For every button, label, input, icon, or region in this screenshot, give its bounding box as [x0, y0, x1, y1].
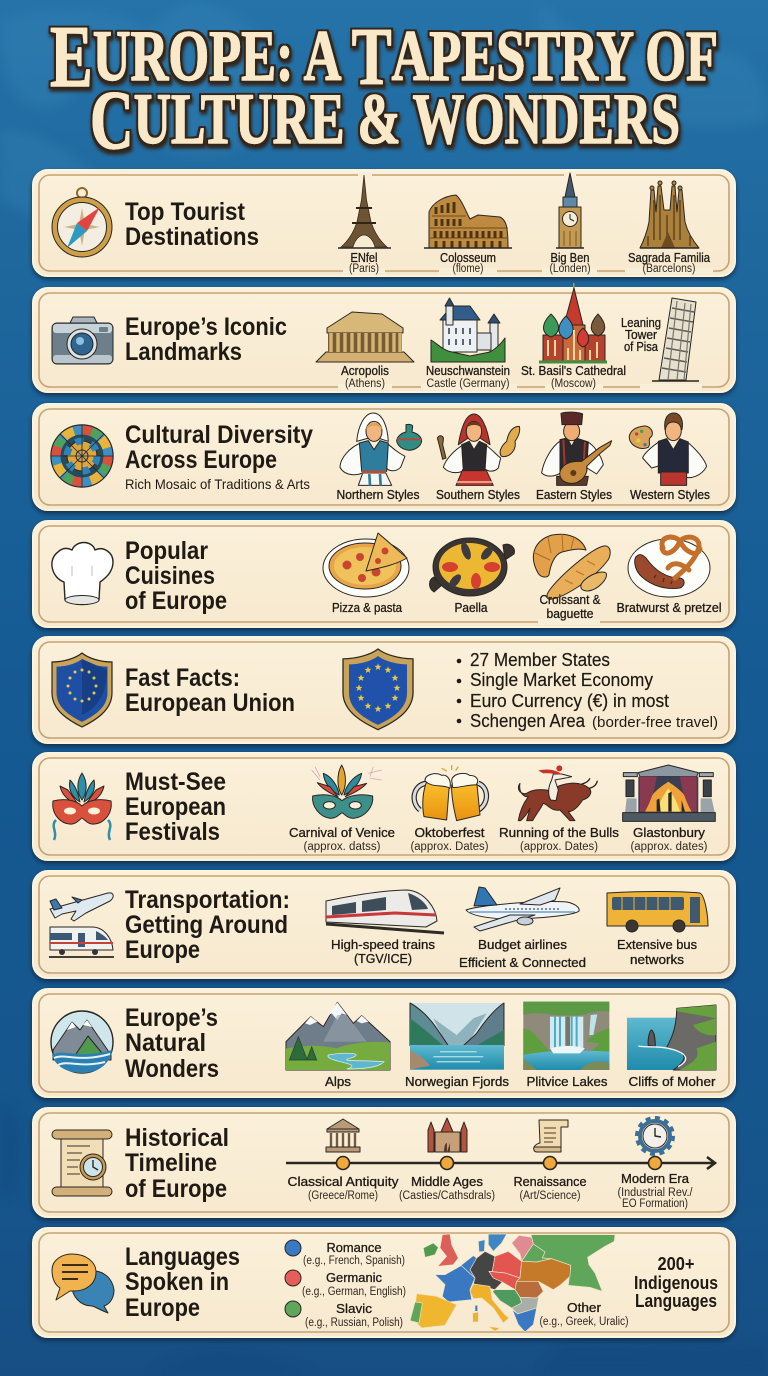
label: Southern Styles: Southern Styles — [436, 488, 520, 502]
facts list — [457, 650, 718, 731]
label: Western Styles: Western Styles — [630, 488, 710, 502]
facts list: 27 Member States — [470, 650, 610, 670]
heading: Europe’s — [125, 1004, 218, 1032]
heading: Landmarks — [125, 338, 242, 366]
legend: Slavic: (e.g., Russian, Polish) — [305, 1317, 403, 1329]
heading: Fast Facts: — [125, 664, 240, 692]
legend: Germanic: Germanic — [326, 1271, 382, 1285]
heading: of Europe — [125, 587, 227, 615]
label: Middle Ages — [399, 1175, 495, 1202]
panel: natural wonders — [33, 989, 735, 1097]
image: Norwegian Fjords — [410, 1003, 504, 1070]
icon: temple — [326, 1119, 360, 1152]
heading: European Union — [125, 689, 295, 717]
callout: 200+ indigenous languages: 200+ — [658, 1254, 694, 1274]
label: Modern Era — [618, 1172, 693, 1210]
label: Other: (e.g., Greek, Uralic) — [540, 1316, 629, 1328]
label: budget airlines: Efficient & Connected — [459, 956, 586, 970]
icon: scroll and clock — [52, 1130, 112, 1196]
heading: Getting Around — [125, 911, 288, 939]
label: Leaning Tower of Pisa: of Pisa — [624, 340, 658, 354]
icon: Big Ben — [556, 173, 584, 248]
label: Classical Antiquity: (Greece/Rome) — [308, 1190, 378, 1202]
heading: Festivals — [125, 818, 220, 846]
panel: transportation — [33, 871, 735, 978]
label: Alps: Alps — [325, 1075, 351, 1089]
icon: Acropolis — [316, 312, 414, 362]
label: Glastonbury: Glastonbury — [633, 826, 706, 840]
panel: cultural diversity — [33, 404, 735, 510]
icon: bull with rider — [518, 765, 597, 821]
label: budget airlines: Budget airlines — [478, 938, 567, 952]
label: Modern Era: (Industrial Rev./ — [618, 1187, 693, 1199]
label: St Basil's Cathedral: (Moscow) — [551, 378, 596, 390]
icon: stained glass mosaic — [51, 425, 113, 487]
heading — [125, 1124, 229, 1203]
label: croissant and baguette: Croissant & — [540, 593, 601, 607]
label: high-speed trains — [331, 938, 435, 966]
heading: Spoken in — [125, 1268, 229, 1296]
panel: historical timeline — [33, 1108, 735, 1217]
legend: Slavic — [285, 1301, 403, 1329]
icon: castle — [428, 1118, 467, 1152]
label: extensive bus networks: networks — [630, 953, 684, 967]
heading — [125, 537, 227, 615]
label: Big Ben: Big Ben — [550, 251, 590, 265]
label: extensive bus networks — [617, 938, 697, 967]
label: Renaissance — [514, 1175, 587, 1202]
figure: Southern style — [437, 414, 520, 485]
heading — [125, 664, 295, 717]
label: Eiffel: ENfel — [350, 251, 378, 265]
label: Acropolis — [341, 364, 389, 390]
heading: Across Europe — [125, 446, 277, 474]
image: Alps — [286, 1002, 390, 1070]
heading: European — [125, 793, 226, 821]
heading: Popular — [125, 537, 208, 565]
label: croissant and baguette — [540, 593, 601, 621]
heading: Europe’s Iconic — [125, 313, 287, 341]
figure: Northern style — [340, 413, 422, 485]
label: Acropolis: (Athens) — [345, 378, 385, 390]
label: Sagrada Familia — [628, 251, 710, 275]
icon: chef hat — [52, 542, 113, 604]
label: Carnival of Venice: Carnival of Venice — [289, 826, 395, 840]
label: bratwurst and pretzel: Bratwurst & pretzel — [616, 601, 722, 615]
image: Cliffs of Moher — [627, 1005, 716, 1070]
subtitle: Rich Mosaic of Traditions & Arts — [125, 476, 310, 492]
icon: Sagrada Familia — [640, 181, 699, 248]
title — [50, 9, 718, 167]
figure: Eastern style — [542, 412, 612, 485]
label: extensive bus networks: Extensive bus — [617, 938, 697, 952]
label: Middle Ages: Middle Ages — [411, 1175, 483, 1189]
heading — [125, 313, 287, 366]
icon: compass — [52, 188, 112, 257]
label: Oktoberfest — [410, 826, 489, 853]
icon: Eiffel Tower — [338, 175, 391, 248]
label: croissant and baguette: baguette — [546, 607, 594, 621]
label: Modern Era: EO Formation) — [622, 1198, 688, 1210]
heading: Languages — [125, 1243, 240, 1271]
icon: EU shield small — [52, 653, 112, 727]
heading: Cultural Diversity — [125, 421, 313, 449]
label: Neuschwanstein Castle — [426, 364, 510, 390]
legend: Romance: Romance — [326, 1241, 382, 1255]
icon: St Basil's Cathedral — [539, 283, 607, 362]
legend: Romance: (e.g., French, Spanish) — [303, 1255, 405, 1267]
facts list: Euro Currency (€) in most — [470, 691, 669, 711]
label: Leaning Tower of Pisa: Tower — [625, 328, 657, 342]
heading: Europe — [125, 1294, 200, 1322]
title: C — [90, 74, 134, 167]
label: St Basil's Cathedral — [521, 364, 626, 390]
label: Eastern Styles: Eastern Styles — [536, 488, 612, 502]
label: Cliffs of Moher: Cliffs of Moher — [628, 1075, 716, 1089]
label: Oktoberfest: Oktoberfest — [414, 826, 485, 840]
callout: 200+ indigenous languages: Languages — [635, 1291, 717, 1311]
panel: top tourist destinations — [33, 170, 735, 276]
icon: paella — [430, 538, 514, 596]
facts list: Schengen Area — [470, 711, 586, 731]
label: Glastonbury: (approx. dates) — [630, 841, 708, 853]
label: Running of the Bulls: (approx. Dates) — [520, 841, 598, 853]
label: Middle Ages: (Casties/Cathsdrals) — [399, 1190, 495, 1202]
icon: camera — [52, 317, 113, 364]
heading: Historical — [125, 1124, 229, 1152]
label: Sagrada Familia: (Barcelons) — [642, 263, 696, 275]
icon: EU shield large — [343, 649, 413, 730]
icon: mountains and waves — [51, 1011, 113, 1073]
label: Colosseum: (flome) — [452, 263, 484, 275]
icon: carnival mask — [53, 773, 111, 840]
icon: concert stage — [623, 765, 715, 821]
label: Classical Antiquity: Classical Antiquity — [288, 1175, 399, 1189]
label: Colosseum: Colosseum — [440, 251, 496, 265]
label: Running of the Bulls: Running of the Bulls — [499, 826, 619, 840]
label: Running of the Bulls — [499, 826, 619, 853]
icon: Venice mask — [312, 765, 382, 818]
label: Leaning Tower of Pisa — [621, 316, 661, 354]
icon: gear clock — [637, 1118, 673, 1154]
panel: fast facts — [33, 637, 735, 743]
label: Neuschwanstein Castle: Castle (Germany) — [426, 378, 510, 390]
label: Sagrada Familia: Sagrada Familia — [628, 251, 710, 265]
heading: Natural — [125, 1029, 206, 1057]
label: Oktoberfest: (approx. Dates) — [410, 841, 489, 853]
heading: Transportation: — [125, 886, 290, 914]
icon: croissant and baguette — [533, 534, 610, 599]
heading: Timeline — [125, 1149, 217, 1177]
heading: of Europe — [125, 1175, 227, 1203]
heading — [125, 1004, 219, 1083]
panel: languages — [33, 1228, 735, 1337]
heading: Must-See — [125, 768, 226, 796]
label: high-speed trains: High-speed trains — [331, 938, 435, 952]
legend: Romance — [285, 1240, 405, 1267]
heading: Destinations — [125, 223, 259, 251]
label: Modern Era: Modern Era — [621, 1172, 689, 1186]
icon: speech bubbles — [52, 1254, 114, 1313]
callout: 200+ indigenous languages: Indigenous — [634, 1273, 718, 1293]
heading: Europe — [125, 936, 200, 964]
label: Eiffel — [349, 251, 379, 275]
panel: festivals — [33, 753, 735, 860]
title: UROPE: A — [93, 16, 352, 96]
title: E — [50, 9, 93, 106]
label: Renaissance: Renaissance — [514, 1175, 587, 1189]
label: Neuschwanstein Castle: Neuschwanstein — [426, 364, 510, 378]
heading — [125, 198, 259, 251]
label: Classical Antiquity — [288, 1175, 399, 1202]
facts list: Single Market Economy — [470, 670, 653, 690]
title: T — [352, 11, 391, 102]
heading — [125, 886, 290, 964]
panel: popular cuisines — [33, 521, 735, 627]
label: Northern Styles: Northern Styles — [336, 488, 420, 502]
label: St Basil's Cathedral: St. Basil's Cathedral — [521, 364, 626, 378]
label: Acropolis: Acropolis — [341, 364, 389, 378]
callout: 200+ indigenous languages — [634, 1254, 718, 1311]
icon: Neuschwanstein Castle — [431, 298, 505, 362]
icon: pizza — [323, 533, 409, 597]
heading: Top Tourist — [125, 198, 246, 226]
heading — [125, 1243, 240, 1322]
label: Carnival of Venice: (approx. datss) — [304, 841, 381, 853]
heading — [125, 768, 226, 846]
heading: Cuisines — [125, 562, 215, 590]
icon: airplane — [466, 887, 579, 931]
heading — [125, 421, 313, 474]
label: Plitvice Lakes: Plitvice Lakes — [526, 1075, 608, 1089]
timeline arrow — [286, 1156, 715, 1170]
icon: beer steins — [414, 765, 486, 821]
label: Carnival of Venice — [289, 826, 395, 853]
label: pizza and pasta: Pizza & pasta — [332, 601, 402, 615]
facts list: (border-free travel) — [592, 714, 718, 731]
icon: bratwurst and pretzel — [628, 537, 710, 597]
icon: bus — [607, 892, 708, 932]
legend: Germanic — [285, 1270, 406, 1298]
label: Colosseum — [440, 251, 496, 275]
label: Big Ben — [550, 251, 591, 275]
icon: high-speed train — [326, 890, 444, 933]
label: Norwegian Fjords: Norwegian Fjords — [405, 1075, 509, 1089]
icon: small plane and train — [49, 893, 114, 957]
figure: Western style — [629, 413, 707, 485]
label: high-speed trains: (TGV/ICE) — [354, 952, 412, 966]
icon: parchment — [534, 1120, 568, 1152]
label: Renaissance: (Art/Science) — [520, 1190, 581, 1202]
legend: Slavic: Slavic — [336, 1302, 372, 1316]
label: Other — [540, 1301, 629, 1328]
panel: iconic landmarks — [33, 283, 735, 392]
label: paella: Paella — [454, 601, 488, 615]
label: Eiffel: (Paris) — [349, 263, 379, 275]
label: Other: Other — [567, 1301, 601, 1315]
legend: Germanic: (e.g., German, English) — [302, 1286, 406, 1298]
icon: Leaning Tower of Pisa — [652, 298, 699, 381]
image: Plitvice Lakes — [523, 1002, 609, 1070]
heading: Wonders — [125, 1055, 219, 1083]
icon: Colosseum — [424, 195, 512, 248]
label: Big Ben: (Londen) — [550, 263, 591, 275]
map of Europe languages — [410, 1234, 615, 1332]
label: Glastonbury — [630, 826, 708, 853]
label: budget airlines — [459, 938, 586, 970]
label: Leaning Tower of Pisa: Leaning — [621, 316, 661, 330]
